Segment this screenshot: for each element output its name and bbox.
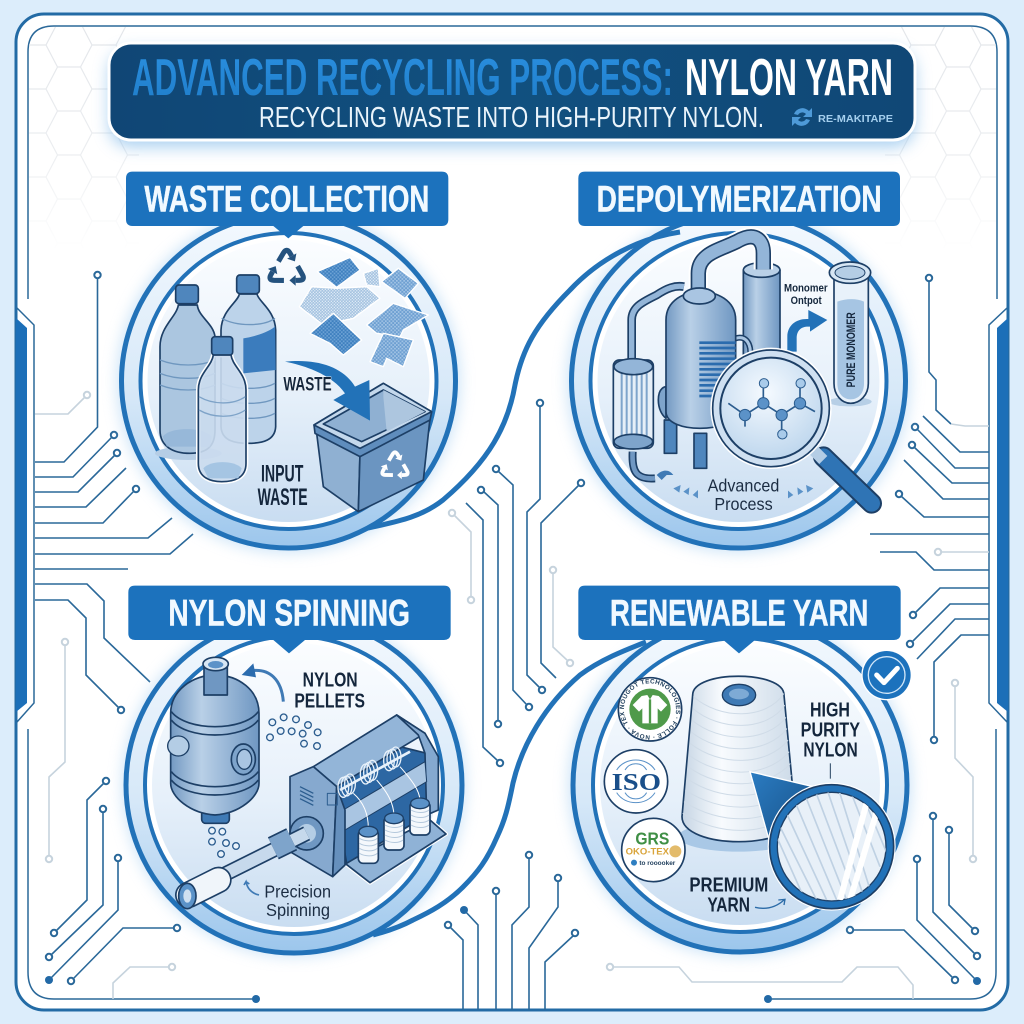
label: high purity nylon: NYLON: [803, 740, 858, 762]
icon: filter cartridge: [613, 286, 684, 480]
label: premium yarn: YARN: [707, 894, 750, 917]
label: nylon pellets: NYLON: [303, 670, 358, 692]
connector: renewable yarn to nylon spinning: [373, 642, 646, 935]
label: input waste: INPUT: [261, 461, 304, 488]
icon: extruder barrel: [179, 817, 323, 909]
icon: magnifying glass with molecule: [710, 348, 872, 503]
panel: nylon spinning: [128, 586, 451, 920]
badge: ISO: [604, 750, 668, 813]
icon: water bottle, large right: [221, 275, 276, 443]
label: nylon pellets: PELLETS: [294, 690, 365, 712]
heading: depolymerization: DEPOLYMERIZATION: [597, 178, 882, 220]
icon: test tube of pure monomer: PURE MONOMER: [844, 312, 858, 387]
label: premium yarn: PREMIUM: [689, 874, 768, 897]
label: nylon pellets: [294, 670, 365, 712]
label: advanced process: Advanced: [708, 476, 779, 496]
logo: RE-MAKITAPE: [818, 113, 893, 125]
arrow: precision spinning: [244, 882, 259, 895]
label: input waste: WASTE: [258, 484, 308, 511]
icon: pellet hopper: [168, 657, 259, 823]
arrow: premium yarn: [755, 899, 785, 908]
icon: water bottle, large left: [155, 285, 222, 460]
label: monomer output: [784, 283, 828, 307]
panel: waste collection: [126, 172, 448, 512]
label: monomer output: Ontpot: [791, 295, 822, 307]
icon: reactor vessel: [658, 288, 750, 468]
badge: GRS and Oeko-Tex: GRS: [635, 828, 669, 848]
heading: waste collection: [126, 172, 448, 238]
badge: organic textile: NOUGOT TECHNOLOGIES · FOLLE · NOVA · TEXTIL: [620, 679, 680, 740]
icon: yarn cone: [678, 676, 798, 852]
heading: waste collection: WASTE COLLECTION: [144, 178, 429, 220]
molecule: [728, 379, 815, 439]
icon: nylon pellets: [209, 714, 321, 857]
ring: renewable yarn: [568, 613, 912, 957]
label: precision spinning: Spinning: [266, 900, 330, 920]
label: waste: WASTE: [283, 375, 332, 396]
label: premium yarn: [689, 874, 768, 917]
arrow: monomer output: [787, 310, 827, 352]
icon: recycling symbol: [265, 250, 307, 287]
label: advanced process: [708, 476, 779, 514]
icon: yarn close-up lens: [750, 772, 896, 911]
badge: GRS and Oeko-Tex: to rooooker: [639, 860, 676, 867]
badge: GRS and Oeko-Tex: OKO-TEX: [626, 847, 669, 857]
title text: NYLON YARN: [685, 49, 893, 107]
icon: recycling bin: [314, 383, 432, 512]
label: high purity nylon: [801, 700, 860, 779]
label: advanced process: Process: [714, 494, 773, 514]
badge: organic textile: [618, 676, 682, 742]
heading: renewable yarn: RENEWABLE YARN: [610, 592, 868, 634]
label: precision spinning: [264, 881, 331, 920]
arrows: process flow: [673, 485, 813, 498]
heading: renewable yarn: [578, 586, 901, 653]
subtitle: RECYCLING WASTE INTO HIGH-PURITY NYLON.: [259, 102, 764, 134]
bobbins: [358, 798, 430, 863]
heading: nylon spinning: [128, 586, 451, 653]
label: monomer output: Monomer: [784, 283, 828, 295]
icon: verified check badge: [861, 650, 912, 700]
ring: waste collection: [116, 209, 460, 553]
label: high purity nylon: HIGH: [810, 700, 850, 722]
ring: depolymerization: [566, 209, 910, 553]
label: input waste: [258, 461, 308, 511]
icon: condenser column: [743, 263, 780, 360]
badge: GRS and Oeko-Tex: [622, 818, 685, 882]
icon: test tube of pure monomer: [828, 262, 872, 406]
title text: ADVANCED RECYCLING PROCESS:: [132, 49, 673, 107]
icon: overhead pipe: [698, 237, 763, 292]
icon: fabric scraps: [299, 257, 428, 367]
hexagon background pattern: [29, 27, 996, 207]
label: high purity nylon: PURITY: [801, 720, 860, 742]
panel: depolymerization: [578, 172, 900, 514]
panel: renewable yarn: [578, 586, 911, 917]
title banner: [109, 43, 915, 147]
circuit traces: [35, 272, 989, 1010]
connector: depolymerization to waste collection: [368, 232, 680, 528]
badge: ISO: ISO: [612, 769, 661, 796]
icon: water bottle, small front: [198, 337, 246, 482]
logo: [792, 108, 893, 126]
arrow: waste into bin: [285, 361, 370, 421]
icon: spinning machine: [290, 715, 446, 883]
arrow: pellets into hopper: [242, 663, 283, 702]
heading: depolymerization: [578, 172, 900, 226]
label: precision spinning: Precision: [264, 881, 331, 901]
heading: nylon spinning: NYLON SPINNING: [168, 592, 410, 634]
ring: nylon spinning: [122, 613, 466, 957]
